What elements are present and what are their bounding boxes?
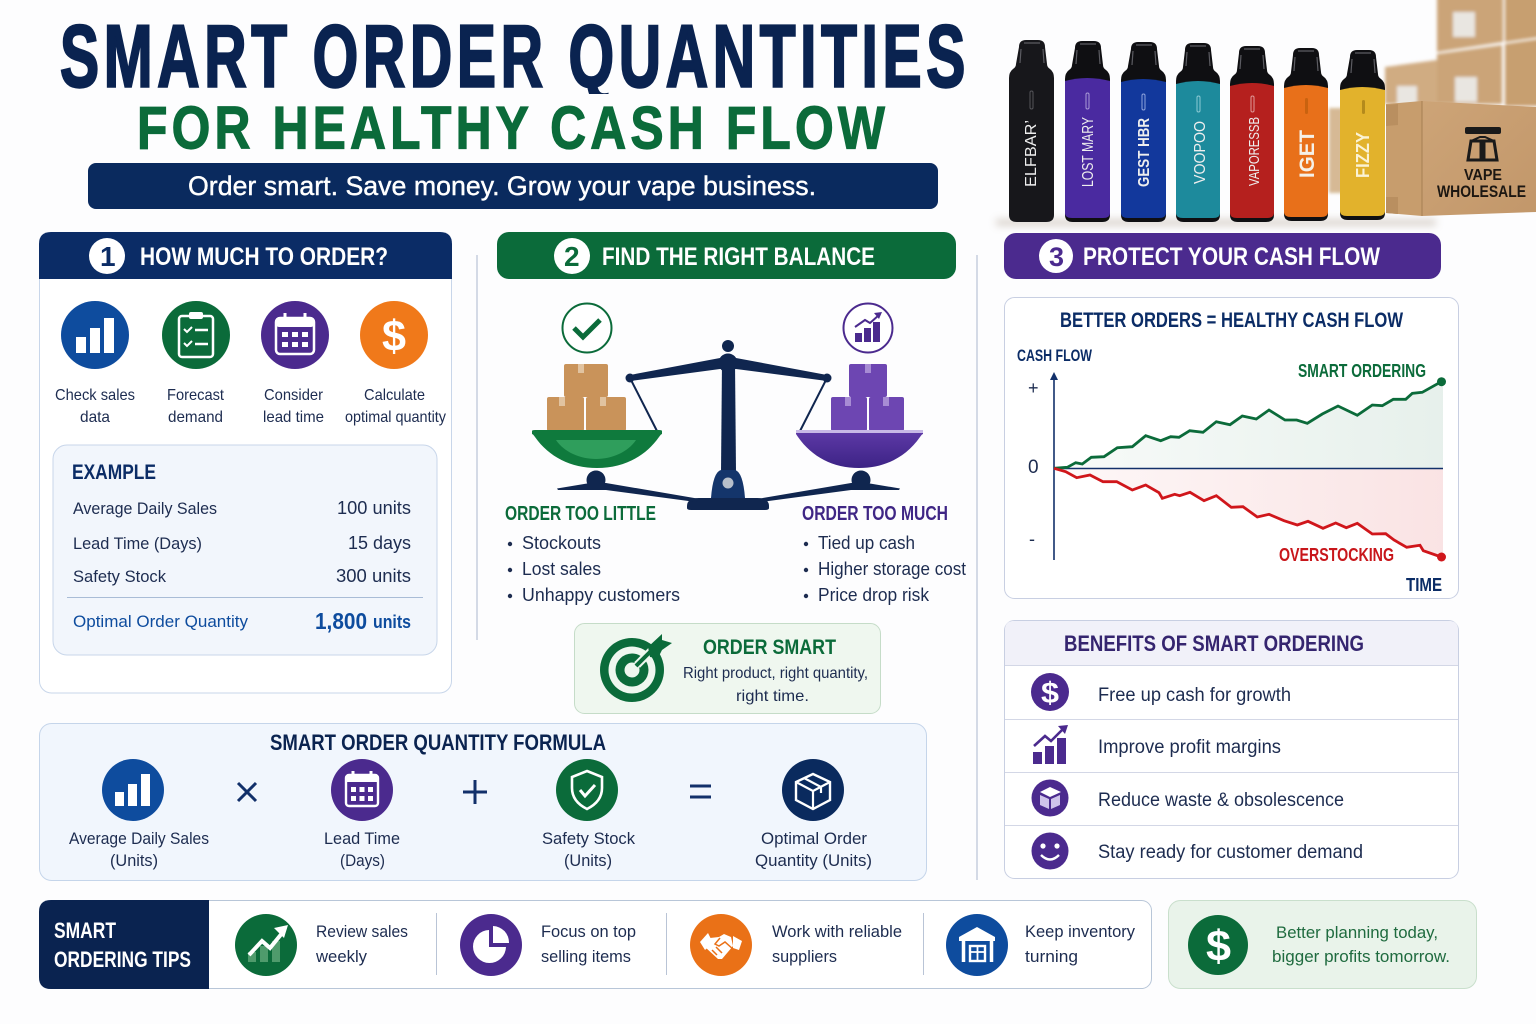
example table: 15 days bbox=[348, 533, 411, 553]
benefit: reduce waste: Reduce waste & obsolescence bbox=[1098, 790, 1344, 811]
panel 2: find the right balance bbox=[497, 232, 966, 714]
smart ordering tips strip: ORDERING TIPS bbox=[54, 947, 191, 972]
benefit: ready for demand bbox=[1032, 832, 1363, 870]
floor shadow bbox=[996, 219, 1436, 226]
callout: order smart: right time. bbox=[736, 688, 809, 705]
example table: Optimal Order Quantity bbox=[73, 612, 249, 631]
line chart: better orders = healthy cash flow bbox=[1004, 298, 1458, 598]
icon: sales data bbox=[61, 301, 129, 369]
benefit: free up cash bbox=[1031, 673, 1291, 711]
list: order too much bbox=[802, 503, 966, 605]
list: order too little: Lost sales bbox=[522, 559, 601, 579]
smart ordering tips strip bbox=[39, 900, 1152, 989]
step label: consider lead time: Consider bbox=[264, 387, 324, 404]
tip: focus on top selling items bbox=[460, 914, 636, 976]
device: Vaporess: VAPORESSB bbox=[1246, 117, 1263, 186]
operator: equals bbox=[690, 786, 711, 797]
benefits of smart ordering bbox=[1004, 620, 1458, 878]
panel 2 heading bbox=[497, 232, 956, 279]
main title: FOR HEALTHY CASH FLOW bbox=[137, 94, 889, 162]
step label: consider lead time: lead time bbox=[263, 409, 324, 426]
operator: multiply bbox=[238, 783, 256, 801]
icon: calculate dollar: $ bbox=[382, 312, 406, 361]
tip: reliable suppliers: Work with reliable bbox=[772, 922, 902, 941]
pan: purple bbox=[796, 430, 923, 468]
formula term: lead time: (Days) bbox=[340, 851, 385, 870]
step label: check sales data: data bbox=[80, 409, 110, 426]
subtitle banner bbox=[88, 163, 938, 209]
formula term: optimal order quantity bbox=[755, 759, 872, 870]
main title bbox=[60, 24, 964, 150]
example table: 100 units bbox=[337, 498, 411, 518]
line chart: better orders = healthy cash flow: 0 bbox=[1028, 457, 1039, 478]
step label: check sales data bbox=[55, 387, 135, 426]
step label: forecast demand: demand bbox=[168, 409, 223, 426]
panel 2 heading: FIND THE RIGHT BALANCE bbox=[602, 243, 875, 271]
benefit: improve margins: Improve profit margins bbox=[1098, 737, 1281, 758]
device: Lost Mary bbox=[1065, 41, 1110, 222]
benefit: improve margins bbox=[1033, 725, 1281, 764]
example table: Average Daily Sales bbox=[73, 499, 217, 518]
device: Gest Bar: GEST HBR bbox=[1136, 118, 1153, 187]
device: Elfbar: ELFBAR’ bbox=[1023, 120, 1040, 187]
device: Fizzy bbox=[1340, 50, 1385, 220]
device: Voopoo: VOOPOO bbox=[1192, 121, 1209, 184]
panel 1: how much to order bbox=[39, 232, 452, 693]
tip: reliable suppliers bbox=[690, 914, 902, 976]
callout: order smart: Right product, right quantity, bbox=[683, 665, 868, 682]
benefits of smart ordering: BENEFITS OF SMART ORDERING bbox=[1064, 631, 1364, 656]
subtitle banner: Order smart. Save money. Grow your vape business. bbox=[188, 171, 816, 201]
formula term: average daily sales: Average Daily Sales bbox=[69, 829, 209, 848]
icon: forecast clipboard bbox=[162, 301, 230, 369]
example table bbox=[53, 445, 437, 655]
formula term: average daily sales: (Units) bbox=[110, 851, 158, 870]
list: order too much: ORDER TOO MUCH bbox=[802, 503, 948, 525]
device: Iget bbox=[1284, 48, 1328, 221]
formula panel: SMART ORDER QUANTITY FORMULA bbox=[270, 730, 606, 755]
step label: consider lead time bbox=[263, 387, 324, 426]
step label: calculate optimal quantity bbox=[345, 387, 446, 426]
smart ordering line bbox=[1054, 361, 1446, 468]
list: order too little: Unhappy customers bbox=[522, 585, 680, 605]
panel 3 heading: PROTECT YOUR CASH FLOW bbox=[1083, 243, 1380, 271]
line chart: better orders = healthy cash flow: + bbox=[1028, 378, 1039, 398]
tip: keep inventory turning: turning bbox=[1025, 947, 1078, 966]
closing callout: better planning today: $ bbox=[1206, 922, 1231, 971]
tip: keep inventory turning: Keep inventory bbox=[1025, 922, 1135, 941]
callout: order smart: ORDER SMART bbox=[703, 636, 836, 659]
closing callout: better planning today bbox=[1168, 900, 1476, 988]
line chart: better orders = healthy cash flow: TIME bbox=[1406, 575, 1442, 595]
formula term: lead time bbox=[324, 759, 400, 870]
formula term: safety stock: (Units) bbox=[564, 851, 612, 870]
line chart: better orders = healthy cash flow: BETTER ORDERS = HEALTHY CASH FLOW bbox=[1060, 309, 1403, 332]
tip: reliable suppliers: suppliers bbox=[772, 947, 837, 966]
example table: Lead Time (Days) bbox=[73, 534, 202, 553]
list: order too much: Tied up cash bbox=[818, 533, 915, 553]
device: Fizzy: FIZZY bbox=[1353, 132, 1373, 178]
formula term: safety stock bbox=[542, 759, 635, 870]
tip: review sales weekly: Review sales bbox=[316, 922, 408, 941]
wholesale box bbox=[1386, 101, 1536, 216]
device: Lost Mary: LOST MARY bbox=[1080, 117, 1097, 187]
list: order too little: Stockouts bbox=[522, 533, 601, 553]
panel 3 heading: 3 bbox=[1049, 242, 1064, 272]
icon: calculate dollar bbox=[360, 301, 428, 369]
section dividers bbox=[477, 255, 977, 880]
balance scale illustration bbox=[532, 340, 923, 510]
step label: calculate optimal quantity: Calculate bbox=[364, 387, 425, 404]
panel 1 heading bbox=[39, 232, 452, 279]
formula term: safety stock: Safety Stock bbox=[542, 829, 635, 848]
icon: lead time calendar bbox=[261, 301, 329, 369]
closing callout: better planning today: Better planning today, bbox=[1276, 923, 1438, 942]
step label: check sales data: Check sales bbox=[55, 387, 135, 404]
tip: keep inventory turning bbox=[946, 914, 1135, 976]
device: Elfbar bbox=[1009, 40, 1054, 222]
pan: green bbox=[532, 430, 662, 468]
closing callout: better planning today: bigger profits tomorrow. bbox=[1272, 947, 1450, 966]
device: Voopoo bbox=[1176, 43, 1220, 222]
main title: SMART ORDER QUANTITIES bbox=[60, 6, 970, 106]
example table: Safety Stock bbox=[73, 567, 166, 586]
scale stand and beam bbox=[557, 340, 900, 510]
tip: review sales weekly bbox=[235, 914, 408, 976]
line chart: better orders = healthy cash flow: - bbox=[1029, 529, 1035, 549]
tip: focus on top selling items: Focus on top bbox=[541, 922, 636, 941]
panel 1 heading: 1 bbox=[100, 241, 116, 272]
operator: plus bbox=[463, 780, 487, 804]
tip: review sales weekly: weekly bbox=[315, 947, 367, 966]
device: Iget: IGET bbox=[1296, 130, 1319, 178]
panel 1 heading: HOW MUCH TO ORDER? bbox=[140, 243, 388, 271]
line chart: better orders = healthy cash flow: CASH FLOW bbox=[1017, 346, 1093, 365]
list: order too much: Price drop risk bbox=[818, 585, 930, 605]
example table: units bbox=[373, 612, 411, 632]
smart ordering line: SMART ORDERING bbox=[1298, 361, 1426, 381]
smart ordering tips strip: SMART bbox=[54, 918, 116, 943]
callout: order smart bbox=[574, 624, 880, 714]
wholesale box: VAPE bbox=[1464, 167, 1502, 184]
icon: growth chart bbox=[844, 304, 892, 352]
formula term: lead time: Lead Time bbox=[324, 829, 400, 848]
panel 3 heading bbox=[1004, 233, 1441, 279]
device: Gest Bar bbox=[1121, 42, 1166, 222]
formula term: optimal order quantity: Optimal Order bbox=[761, 829, 867, 848]
product photo: vape devices and wholesale boxes bbox=[996, 0, 1536, 226]
benefit: free up cash: $ bbox=[1041, 677, 1059, 710]
step label: forecast demand: Forecast bbox=[167, 387, 225, 404]
formula panel bbox=[40, 724, 926, 880]
benefit: ready for demand: Stay ready for customer demand bbox=[1098, 842, 1363, 863]
list: order too little bbox=[505, 503, 680, 605]
overstocking line bbox=[1054, 468, 1446, 565]
boxes: too little bbox=[547, 364, 626, 431]
formula term: average daily sales bbox=[69, 759, 209, 870]
step label: calculate optimal quantity: optimal quantity bbox=[345, 409, 446, 426]
panel 3: protect your cash flow bbox=[1004, 233, 1458, 878]
step label: forecast demand bbox=[167, 387, 225, 426]
icon: target bbox=[600, 634, 672, 702]
example table: 300 units bbox=[336, 566, 411, 586]
overstocking line: OVERSTOCKING bbox=[1279, 545, 1394, 565]
benefit: free up cash: Free up cash for growth bbox=[1098, 685, 1291, 706]
icon: check mark bbox=[562, 304, 612, 352]
panel 2 heading: 2 bbox=[564, 241, 580, 272]
tip: focus on top selling items: selling items bbox=[541, 947, 631, 966]
formula term: optimal order quantity: Quantity (Units) bbox=[755, 851, 872, 870]
list: order too little: ORDER TOO LITTLE bbox=[505, 503, 656, 525]
benefit: reduce waste bbox=[1032, 780, 1344, 816]
device: Vaporess bbox=[1230, 46, 1274, 222]
list: order too much: Higher storage cost bbox=[818, 559, 966, 579]
example table: EXAMPLE bbox=[72, 461, 156, 484]
example table: 1,800 bbox=[315, 608, 367, 634]
boxes: too much bbox=[831, 364, 904, 431]
